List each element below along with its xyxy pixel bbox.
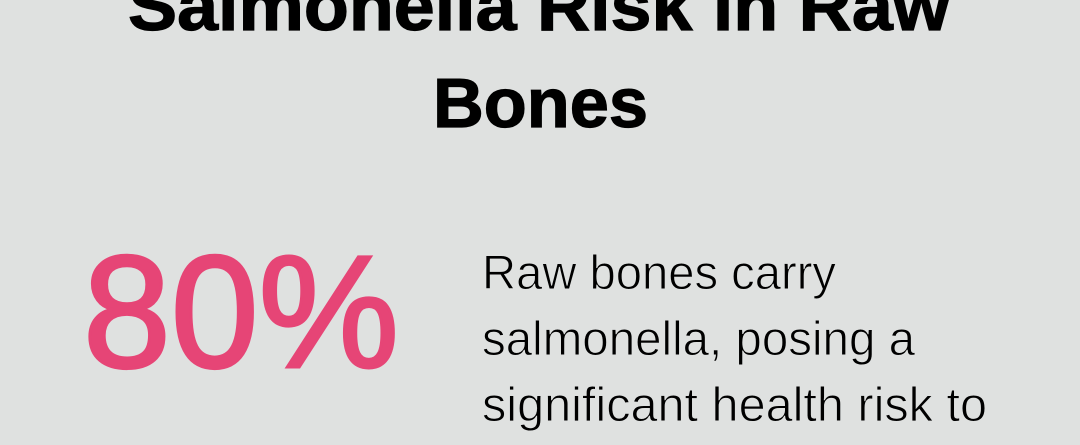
- description text: [482, 247, 987, 432]
- statistic: 80%: 80%: [83, 222, 399, 401]
- description text: salmonella, posing a: [482, 313, 915, 366]
- description text: significant health risk to: [482, 379, 987, 432]
- title: [128, 0, 951, 142]
- description text: Raw bones carry: [482, 247, 836, 300]
- title: Bones: [433, 64, 648, 142]
